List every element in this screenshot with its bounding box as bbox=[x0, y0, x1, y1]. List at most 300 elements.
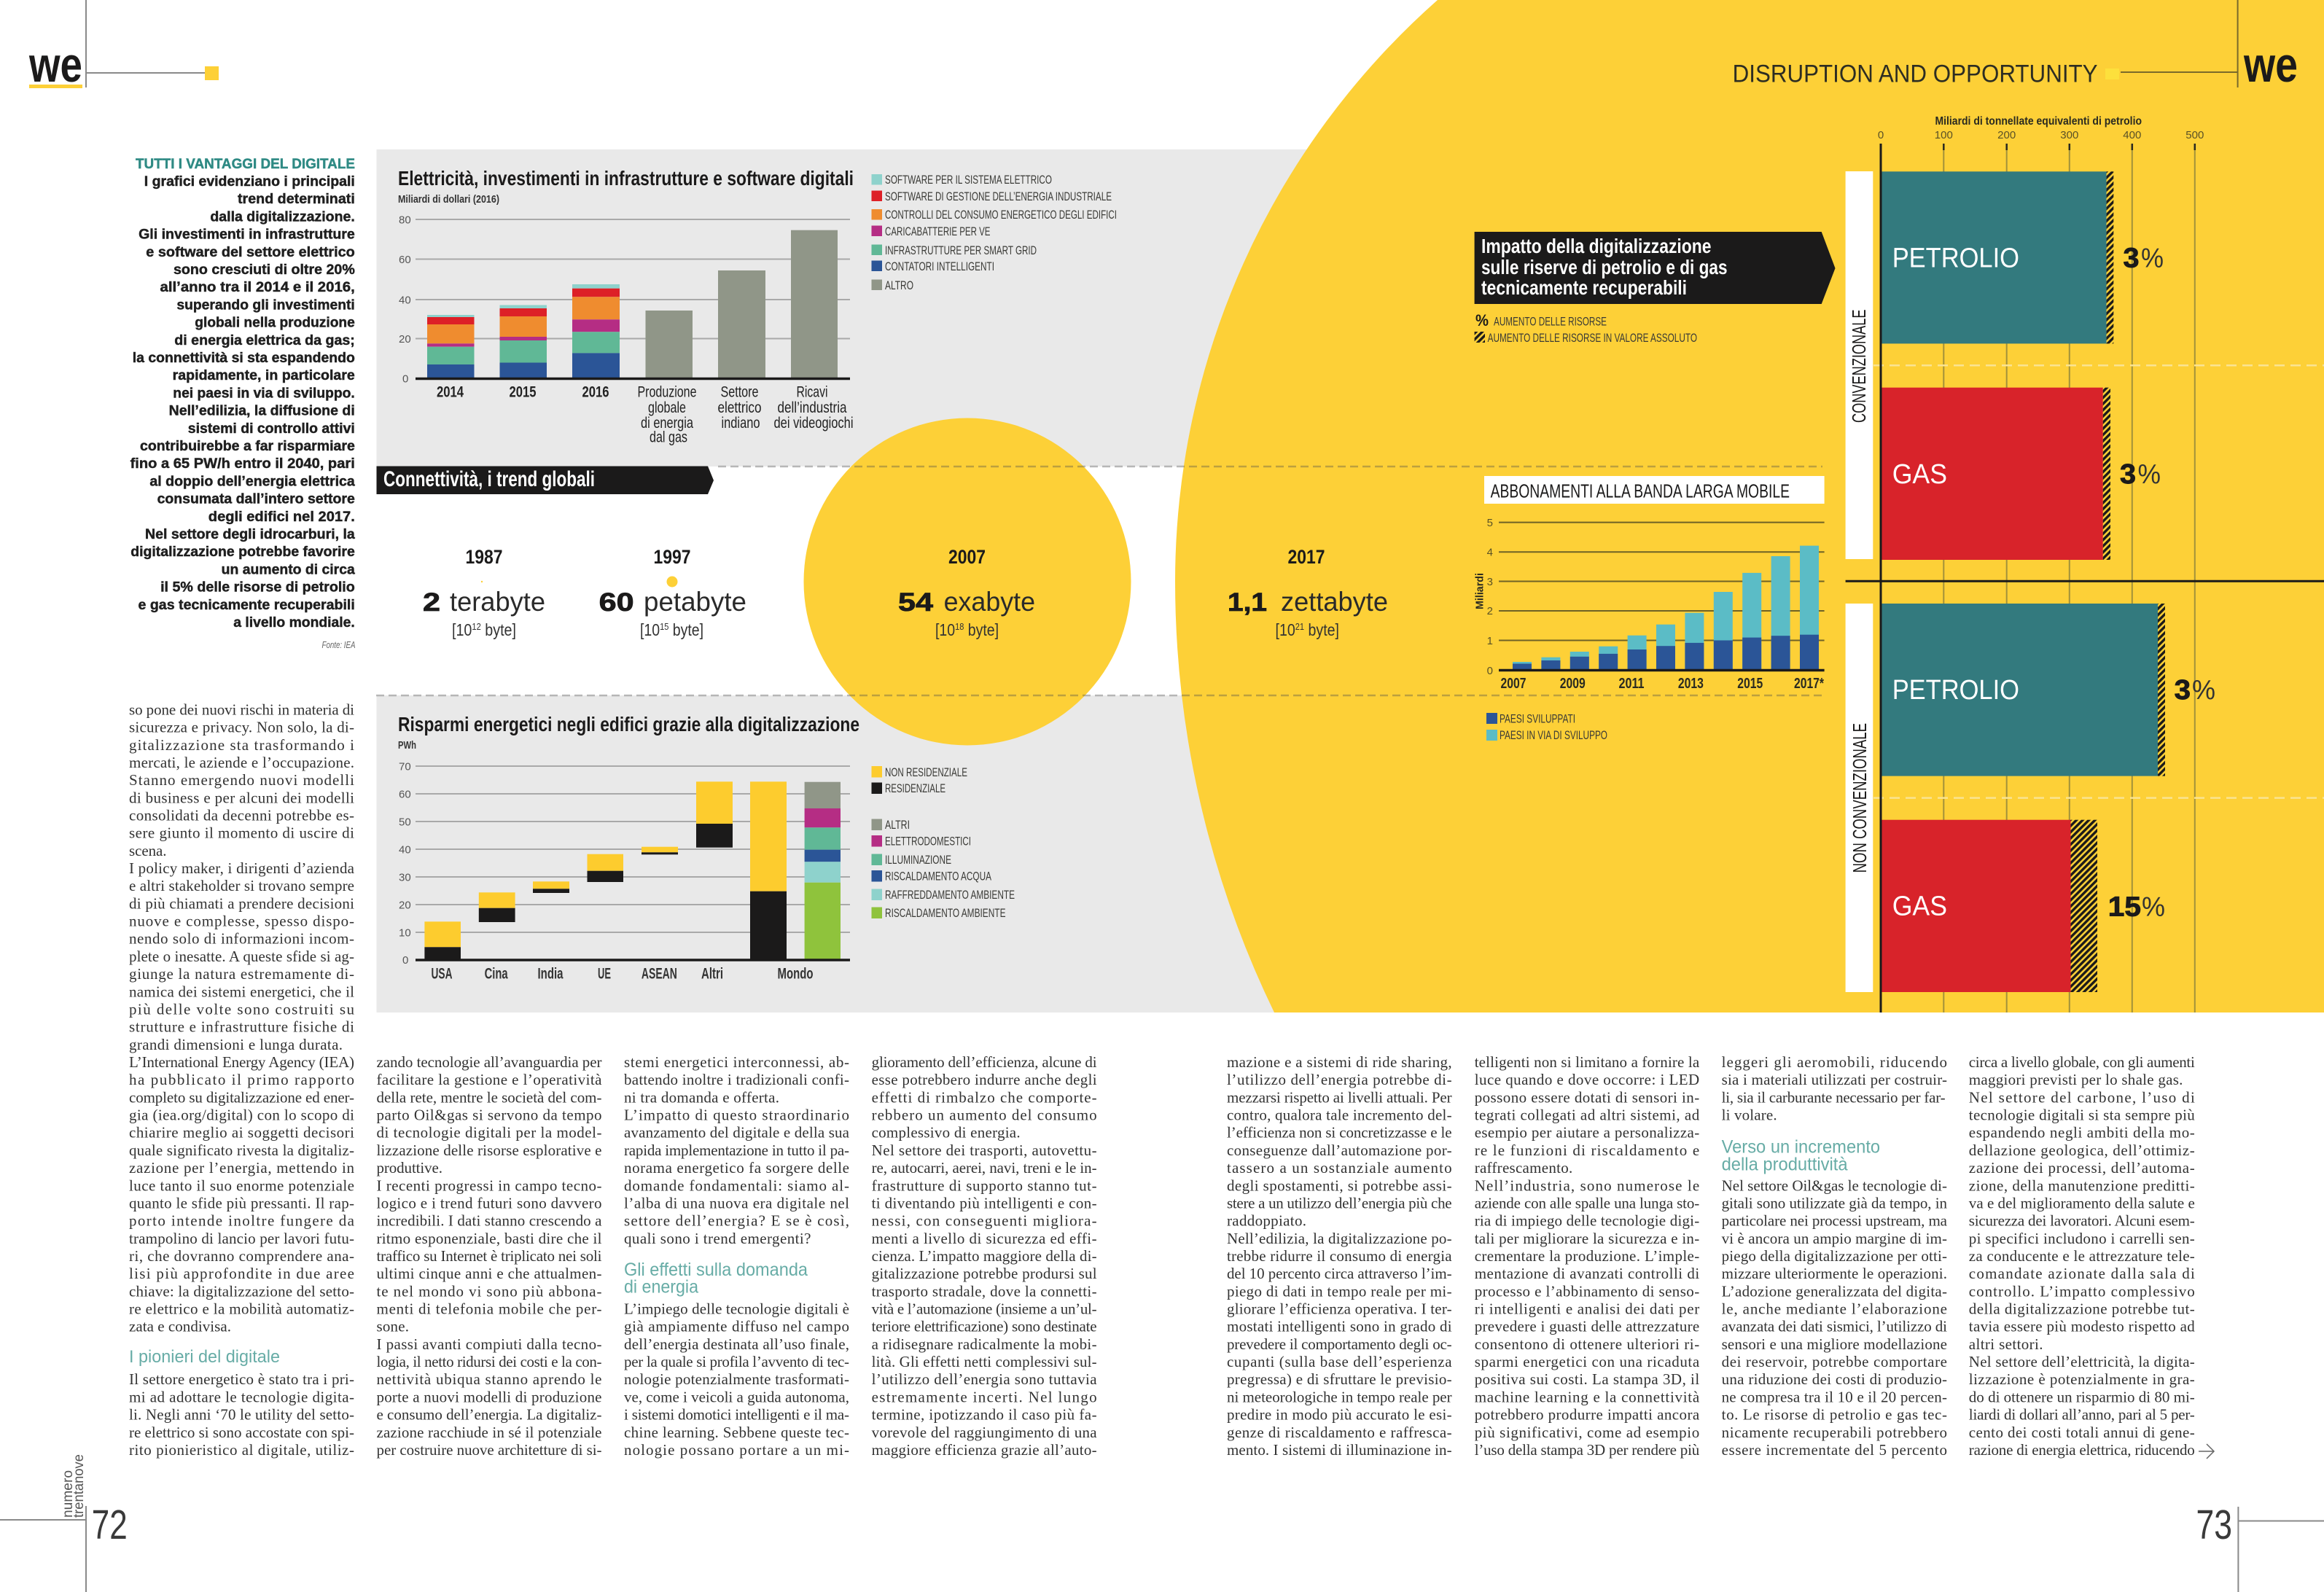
y axis labels: 20 bbox=[399, 333, 411, 346]
legend: SOFTWARE PER IL SISTEMA ELETTRICO bbox=[885, 173, 1052, 187]
callout: impatto della digitalizzazione: tecnicamente recuperabili bbox=[1481, 276, 1687, 299]
legend: CARICABATTERIE PER VE bbox=[885, 225, 990, 238]
bar: petrolio non convenzionale bbox=[1881, 604, 2215, 776]
article column 7: L’adozione generalizzata del digita- bbox=[1722, 1282, 1947, 1300]
article column 1: strutture e infrastrutture fisiche di bbox=[129, 1018, 354, 1036]
article column 4: gitalizzazione potrebbe prodursi sul bbox=[872, 1265, 1097, 1282]
y axis labels: 40 bbox=[399, 844, 411, 856]
article column 5: l’efficienza non si concretizzasse e le bbox=[1227, 1124, 1452, 1142]
article column 7: nicamente recuperabili potrebbero bbox=[1722, 1424, 1947, 1441]
article column 8: razione di energia elettrica, riducendo bbox=[1969, 1441, 2195, 1459]
article column 8: altri settori. bbox=[1969, 1335, 2043, 1353]
article column 7: una riduzione dei costi di produzio- bbox=[1722, 1370, 1947, 1388]
article column 1: ha pubblicato il primo rapporto bbox=[129, 1071, 354, 1088]
article column 7: essere incrementate del 5 percento bbox=[1722, 1441, 1947, 1459]
y axis labels: 5 bbox=[1487, 517, 1493, 529]
y axis labels bbox=[399, 761, 411, 967]
timeline 1997: byte] bbox=[668, 620, 703, 639]
timeline 1997: [10 bbox=[640, 620, 663, 639]
label band convenzionale: CONVENZIONALE bbox=[1848, 309, 1870, 423]
zero axis bbox=[1879, 144, 1882, 1012]
article column 8: tecnologie digitali si sta sempre più bbox=[1969, 1107, 2195, 1124]
article column 1: luce tanto il suo enorme potenziale bbox=[129, 1177, 354, 1194]
timeline 2007: 18 bbox=[955, 621, 964, 632]
sidebar: tutti i vantaggi del digitale: la connettività si sta espandendo bbox=[133, 351, 355, 366]
article column 8: della digitalizzazione potrebbe tut- bbox=[1969, 1300, 2195, 1318]
divider bbox=[1846, 580, 2324, 582]
x axis labels: 2009 bbox=[1560, 676, 1586, 692]
article column 6: prevedere i guasti delle attrezzature bbox=[1475, 1318, 1699, 1335]
chart: riserve petrolio e gas bbox=[1846, 115, 2324, 1012]
bar: petrolio convenzionale bbox=[1881, 171, 2164, 343]
article column 2: ritmo esponenziale, basti dire che il bbox=[376, 1230, 602, 1247]
legend: impact: % bbox=[1475, 311, 1489, 329]
dashed line top bbox=[718, 466, 1822, 467]
article column 5: degli spostamenti, si potrebbe assi- bbox=[1227, 1177, 1452, 1194]
article column 5: Nell’edilizia, la digitalizzazione po- bbox=[1227, 1230, 1452, 1247]
article column 2: per costruire nuove architetture di si- bbox=[376, 1441, 602, 1459]
page number 72: 72 bbox=[92, 1502, 128, 1548]
article column 4: teriore elettrificazione) sono destinate bbox=[872, 1318, 1097, 1335]
article column 6 bbox=[1475, 1053, 1700, 1459]
article column 1 bbox=[129, 701, 355, 1459]
article column 8: espandendo negli ambiti della mo- bbox=[1969, 1124, 2195, 1142]
dashed line bottom bbox=[376, 695, 1822, 696]
article column 7: to. Le risorse di petrolio e gas tec- bbox=[1722, 1406, 1947, 1424]
article column 1: I policy maker, i dirigenti d’azienda bbox=[129, 859, 355, 877]
article column 1: sicurezza e privacy. Non solo, la di- bbox=[129, 719, 354, 736]
page number 73: 73 bbox=[2196, 1502, 2232, 1548]
article column 6: consentono di ottenere ulteriori ri- bbox=[1475, 1335, 1699, 1353]
article column 8: dellazione geologica, dell’ottimiz- bbox=[1969, 1142, 2195, 1159]
article column 7: avanzata dei dati sismici, l’utilizzo di bbox=[1722, 1318, 1947, 1335]
big yellow circle 2017 bbox=[1175, 0, 2324, 1012]
article column 5: mazione e a sistemi di ride sharing, bbox=[1227, 1053, 1452, 1071]
bar: gas convenzionale: GAS bbox=[1892, 459, 1947, 490]
article column 3: settore dell’energia? E se è così, bbox=[624, 1212, 849, 1230]
bar: petrolio non convenzionale: PETROLIO bbox=[1892, 675, 2019, 706]
article column 4: a ridisegnare radicalmente la mobi- bbox=[872, 1335, 1097, 1353]
sidebar: tutti i vantaggi del digitale: sistemi di controllo attivi bbox=[188, 421, 355, 437]
light dashed separators bbox=[1873, 365, 2324, 798]
bar 2016 bbox=[572, 284, 620, 378]
article column 1: di più chiamati a prendere decisioni bbox=[129, 894, 354, 912]
article column 3: dell’energia destinata all’uso finale, bbox=[624, 1335, 849, 1353]
x axis labels: dell’industria bbox=[777, 399, 847, 416]
x axis labels: UE bbox=[598, 965, 611, 982]
article column 8: maggiori previsti per lo shale gas. bbox=[1969, 1071, 2183, 1088]
article column 1: Il settore energetico è stato tra i pri- bbox=[129, 1370, 354, 1388]
article column 5: cupanti (sulla base dell’esperienza bbox=[1227, 1353, 1452, 1370]
article column 1: giunge la natura estremamente di- bbox=[129, 965, 354, 983]
timeline 2017: 2017 bbox=[1287, 546, 1325, 568]
bars developed countries bbox=[1513, 635, 1819, 670]
article column 6: Nell’industria, sono numerose le bbox=[1475, 1177, 1699, 1194]
article column 7: gitali sono utilizzate già da tempo, in bbox=[1722, 1194, 1948, 1211]
header right: section title and logo: DISRUPTION AND OPPORTUNITY bbox=[1733, 60, 2098, 87]
article column 4: glioramento dell’efficienza, alcune di bbox=[872, 1053, 1097, 1071]
timeline 1987 bbox=[423, 546, 545, 639]
y axis labels bbox=[399, 214, 411, 385]
x axis labels: indiano bbox=[722, 415, 760, 432]
sidebar: tutti i vantaggi del digitale: digitalizzazione potrebbe favorire bbox=[130, 545, 355, 560]
article column 4: ti diventando più intelligenti e con- bbox=[872, 1194, 1097, 1211]
article column 3: L’impatto di questo straordinario bbox=[624, 1107, 849, 1124]
article column 1: li. Negli anni ‘70 le utility del setto- bbox=[129, 1406, 354, 1424]
bar: gas non convenzionale: GAS bbox=[1892, 891, 1947, 922]
article column 2: zando tecnologie all’avanguardia per bbox=[376, 1053, 602, 1071]
article column 7: li, sia il carburante necessario per far- bbox=[1722, 1088, 1946, 1106]
sidebar: tutti i vantaggi del digitale: un aumento di circa bbox=[222, 562, 355, 577]
header right: section title and logo bbox=[1733, 0, 2298, 93]
article column 1: consolidati da decenni potrebbe es- bbox=[129, 806, 354, 824]
x axis labels: 2016 bbox=[582, 383, 609, 401]
timeline 2007: 54 bbox=[898, 588, 934, 617]
timeline 2017: [10 bbox=[1276, 620, 1298, 639]
legend: RISCALDAMENTO AMBIENTE bbox=[885, 906, 1006, 920]
article column 2: logico e i trend futuri sono davvero bbox=[376, 1194, 602, 1211]
icon: yellow square bbox=[205, 66, 219, 80]
article column 1: e altri stakeholder si trovano sempre bbox=[129, 877, 354, 894]
x axis labels: 2013 bbox=[1678, 676, 1704, 692]
banner: connettivita trend globali: Connettività, i trend globali bbox=[383, 467, 595, 491]
article column 5: genze di riscaldamento e raffresca- bbox=[1227, 1424, 1452, 1441]
article column 6: esempio per aiutare a personalizza- bbox=[1475, 1124, 1699, 1142]
article column 2: ultimi cinque anni e che attualmen- bbox=[376, 1265, 602, 1282]
footer left: crop marks, issue label and page number bbox=[0, 1454, 128, 1592]
x axis labels bbox=[1500, 676, 1824, 692]
article column 8: lizzazione è potenzialmente in gra- bbox=[1969, 1370, 2195, 1388]
article column 1: gia (iea.org/digital) con lo scopo di bbox=[129, 1107, 354, 1124]
article column 7: dei reservoir, potrebbe comportare bbox=[1722, 1353, 1947, 1370]
bar: gas convenzionale: % bbox=[2137, 459, 2161, 490]
y axis labels: 0 bbox=[1487, 665, 1493, 677]
article column 7: particolare nei processi upstream, ma bbox=[1722, 1212, 1948, 1230]
article column 5: mezzarsi rispetto ai livelli attuali. Per bbox=[1227, 1088, 1452, 1106]
subheading: verso un incremento della produttivita: Verso un incremento bbox=[1722, 1136, 1880, 1157]
sidebar: tutti i vantaggi del digitale: all’anno tra il 2014 e il 2016, bbox=[160, 280, 355, 295]
timeline 1997: 60 bbox=[599, 588, 634, 617]
bar 2015 bbox=[500, 305, 547, 378]
bar: gas non convenzionale: 15 bbox=[2108, 892, 2141, 923]
article column 1: lisi più approfondite in due aree bbox=[129, 1265, 354, 1282]
article column 1: trampolino di lancio per lavori futu- bbox=[129, 1230, 354, 1247]
article column 3: battendo inoltre i tradizionali confi- bbox=[624, 1071, 849, 1088]
article column 4: maggiore efficienza grazie all’auto- bbox=[872, 1441, 1097, 1459]
sidebar: tutti i vantaggi del digitale: degli edifici nel 2017. bbox=[208, 510, 355, 525]
article column 5: gliorare l’efficienza operativa. I ter- bbox=[1227, 1300, 1452, 1318]
bar: petrolio non convenzionale: % bbox=[2192, 675, 2215, 706]
bar: gas convenzionale bbox=[1881, 388, 2161, 560]
article column 2: e consumo dell’energia. La digitaliz- bbox=[376, 1406, 602, 1424]
x axis labels: dei videogiochi bbox=[774, 415, 853, 432]
timeline 1997 bbox=[599, 546, 746, 639]
chart: investimenti in infrastrutture e software digitali bbox=[398, 167, 1117, 446]
timeline 1987: 1987 bbox=[465, 546, 503, 568]
axis tick labels bbox=[1878, 129, 2204, 141]
article column 1: nendo solo di informazioni incom- bbox=[129, 930, 354, 948]
article column 5: mostati intelligenti sono in grado di bbox=[1227, 1318, 1452, 1335]
article column 1: mi ad adottare le tecnologie digita- bbox=[129, 1388, 354, 1405]
waterfall bars yellow bbox=[424, 781, 787, 947]
legend: RISCALDAMENTO ACQUA bbox=[885, 869, 991, 883]
arrow: continue bbox=[2199, 1444, 2214, 1459]
article column 2 bbox=[376, 1053, 602, 1459]
article column 8: zazione dei processi, dell’automa- bbox=[1969, 1159, 2195, 1177]
timeline 2017: byte] bbox=[1304, 620, 1339, 639]
article column 5: del 10 percento circa attraverso l’im- bbox=[1227, 1265, 1452, 1282]
article column 4: l’utilizzo dell’energia sono tuttavia bbox=[872, 1370, 1097, 1388]
article column 8: va e del miglioramento della salute e bbox=[1969, 1194, 2195, 1211]
timeline 1987: terabyte bbox=[450, 587, 545, 617]
article column 2: zazione racchiude in sé il potenziale bbox=[376, 1424, 602, 1441]
article column 6: sparmi energetici con una ricaduta bbox=[1475, 1353, 1700, 1370]
stacked world bar by end use bbox=[805, 782, 841, 960]
article column 2: I passi avanti compiuti dalla tecno- bbox=[376, 1335, 602, 1353]
x axis labels: USA bbox=[432, 965, 452, 982]
y axis labels: 0 bbox=[402, 373, 408, 385]
y axis title: Miliardi bbox=[1474, 573, 1486, 609]
article column 6: luce quando e dove occorre: i LED bbox=[1475, 1071, 1699, 1088]
legend: PAESI IN VIA DI SVILUPPO bbox=[1500, 728, 1607, 742]
timeline 2017: 1,1 bbox=[1228, 588, 1267, 617]
article column 3: i sistemi domotici intelligenti e il ma- bbox=[624, 1406, 849, 1424]
article column 8: controllo. L’impatto complessivo bbox=[1969, 1282, 2195, 1300]
article column 1: porto intende inoltre fungere da bbox=[129, 1212, 355, 1230]
article column 1: so pone dei nuovi rischi in materia di bbox=[129, 701, 354, 718]
article column 8: do di ottenere un risparmio di 80 mi- bbox=[1969, 1388, 2195, 1405]
article column 2: facilitare la gestione e l’operatività bbox=[376, 1071, 602, 1088]
article column 7: li volare. bbox=[1722, 1107, 1777, 1124]
article column 3: L’impiego delle tecnologie digitali è bbox=[624, 1300, 849, 1318]
y axis labels: 80 bbox=[399, 214, 411, 226]
bar: petrolio non convenzionale: 3 bbox=[2175, 675, 2191, 706]
article column 1: mercati, le aziende e l’occupazione. bbox=[129, 754, 354, 771]
y axis labels: 70 bbox=[399, 761, 411, 773]
x axis labels: Produzione bbox=[637, 383, 697, 401]
x axis labels: 2015 bbox=[1737, 676, 1763, 692]
y axis labels: 20 bbox=[399, 900, 411, 911]
sidebar: tutti i vantaggi del digitale: superando gli investimenti bbox=[176, 297, 355, 313]
article column 2: menti di telefonia mobile che per- bbox=[376, 1300, 602, 1318]
article column 1: chiarire meglio ai soggetti decisori bbox=[129, 1124, 354, 1142]
axis title: Miliardi di tonnellate equivalenti di petrolio bbox=[1935, 115, 2142, 128]
article column 8: tavia essere più modesto rispetto ad bbox=[1969, 1318, 2195, 1335]
article column 4: esse potrebbero indurre anche degli bbox=[872, 1071, 1097, 1088]
article column 3: ve, come i veicoli a guida autonoma, bbox=[624, 1388, 849, 1405]
x axis labels: 2014 bbox=[437, 383, 464, 401]
sidebar: tutti i vantaggi del digitale: contribuirebbe a far risparmiare bbox=[140, 439, 355, 454]
article column 2: incredibili. I dati stanno crescendo a bbox=[376, 1212, 602, 1230]
article column 4: nessi, con conseguenti migliora- bbox=[872, 1212, 1097, 1230]
article column 1: ri, che dovranno comprendere ana- bbox=[129, 1247, 354, 1265]
article column 2: nettività ubiqua stanno aprendo le bbox=[376, 1370, 602, 1388]
icon: light yellow square bbox=[2105, 69, 2119, 79]
timeline 1987: byte] bbox=[481, 620, 516, 639]
article column 6: processo e l’abbinamento di senso- bbox=[1475, 1282, 1699, 1300]
y axis labels: 0 bbox=[402, 954, 408, 967]
article column 5: stere a un utilizzo dell’energia più che bbox=[1227, 1194, 1452, 1211]
article column 5: piego di dati in tempo reale per mi- bbox=[1227, 1282, 1452, 1300]
y axis labels: 40 bbox=[399, 294, 411, 306]
article column 6: ria di impiego delle tecnologie digi- bbox=[1475, 1212, 1699, 1230]
article column 2: sone. bbox=[376, 1318, 409, 1335]
article column 1: nuove e complesse, spesso dispo- bbox=[129, 913, 354, 930]
x axis labels: globale bbox=[648, 399, 686, 416]
y axis labels: 60 bbox=[399, 254, 411, 266]
x axis labels: Mondo bbox=[777, 965, 814, 982]
article column 7: le, anche mediante l’elaborazione bbox=[1722, 1300, 1947, 1318]
y axis labels: 2 bbox=[1487, 605, 1493, 617]
timeline 2007: exabyte bbox=[944, 587, 1035, 617]
article column 7 bbox=[1722, 1053, 1948, 1459]
article column 5: l’utilizzo dell’energia potrebbe di- bbox=[1227, 1071, 1452, 1088]
legend bbox=[1486, 711, 1607, 742]
article column 1: re elettrico e la mobilità automatiz- bbox=[129, 1300, 354, 1318]
legend: PAESI SVILUPPATI bbox=[1500, 711, 1575, 725]
article column 3: quali sono i trend emergenti? bbox=[624, 1230, 811, 1247]
article column 6: più significativi, come ad esempio bbox=[1475, 1424, 1699, 1441]
subheading: gli effetti sulla domanda di energia: Gli effetti sulla domanda bbox=[624, 1260, 808, 1280]
bar: gas non convenzionale: % bbox=[2142, 892, 2165, 923]
axis tick labels: 300 bbox=[2060, 129, 2078, 141]
article column 2: della rete, mentre le società del com- bbox=[376, 1088, 602, 1106]
legend: ALTRI bbox=[885, 818, 910, 832]
y axis labels: 1 bbox=[1487, 635, 1493, 647]
subheading: verso un incremento della produttivita bbox=[1722, 1136, 1880, 1175]
article column 6: mentazione di avanzati controlli di bbox=[1475, 1265, 1699, 1282]
article column 8: Nel settore del carbone, l’uso di bbox=[1969, 1088, 2195, 1106]
article column 2: I recenti progressi in campo tecno- bbox=[376, 1177, 602, 1194]
sidebar: tutti i vantaggi del digitale: nei paesi in via di sviluppo. bbox=[173, 386, 355, 401]
axis tick labels: 400 bbox=[2123, 129, 2141, 141]
article column 6: re le funzioni di riscaldamento e bbox=[1475, 1142, 1699, 1159]
article column 4: vorevole del raggiungimento di una bbox=[872, 1424, 1097, 1441]
article column 2: parto Oil&gas si servono da tempo bbox=[376, 1107, 602, 1124]
sidebar: tutti i vantaggi del digitale: globali nella produzione bbox=[195, 316, 355, 331]
axis tick labels: 0 bbox=[1878, 129, 1884, 141]
article column 7: sensori e una migliore modellazione bbox=[1722, 1335, 1947, 1353]
article column 5: raddoppiato. bbox=[1227, 1212, 1306, 1230]
article column 6: tali per migliorare la sicurezza e in- bbox=[1475, 1230, 1699, 1247]
article column 6: crementare la produzione. L’imple- bbox=[1475, 1247, 1699, 1265]
logo we: we bbox=[28, 37, 82, 93]
legend: RESIDENZIALE bbox=[885, 781, 945, 795]
timeline 2007: [10 bbox=[935, 620, 959, 639]
comparison bars bbox=[646, 230, 838, 378]
article column 8: liardi di dollari all’anno, pari al 5 per- bbox=[1969, 1406, 2195, 1424]
timeline 2017: 21 bbox=[1295, 621, 1304, 632]
article column 7: sia i materiali utilizzati per costruir- bbox=[1722, 1071, 1947, 1088]
legend: CONTROLLI DEL CONSUMO ENERGETICO DEGLI EDIFICI bbox=[885, 208, 1117, 222]
article column 7: mizzare ulteriormente le operazioni. bbox=[1722, 1265, 1947, 1282]
timeline 1987: 2 bbox=[423, 588, 440, 617]
x axis labels: ASEAN bbox=[642, 965, 677, 982]
article column 7: vi è ancora un ampio margine di im- bbox=[1722, 1230, 1947, 1247]
article column 3: l’alba di una nuova era digitale nel bbox=[624, 1194, 849, 1211]
article column 3: chine learning. Sebbene queste tec- bbox=[624, 1424, 849, 1441]
timeline 1987: 12 bbox=[472, 621, 481, 632]
chart title box: ABBONAMENTI ALLA BANDA LARGA MOBILE bbox=[1491, 480, 1790, 502]
article column 8: Nel settore dell’elettricità, la digita- bbox=[1969, 1353, 2195, 1370]
article column 2: produttive. bbox=[376, 1159, 442, 1177]
chart: abbonamenti alla banda larga mobile bbox=[1474, 476, 1825, 742]
article column 7: piego della digitalizzazione per otti- bbox=[1722, 1247, 1947, 1265]
article column 4: Nel settore dei trasporti, autovettu- bbox=[872, 1142, 1097, 1159]
bar: petrolio convenzionale: 3 bbox=[2123, 243, 2139, 274]
article column 5: trebbe ridurre il consumo di energia bbox=[1227, 1247, 1452, 1265]
article column 3: domande fondamentali: siamo al- bbox=[624, 1177, 849, 1194]
panel: grey background electricity bbox=[376, 149, 1324, 467]
article column 8: za conducente e le attrezzature tele- bbox=[1969, 1247, 2195, 1265]
article column 6: machine learning e la connettività bbox=[1475, 1388, 1700, 1405]
bar: petrolio convenzionale: % bbox=[2141, 243, 2164, 274]
legend: impact: AUMENTO DELLE RISORSE bbox=[1494, 314, 1607, 328]
article column 1: rito pionieristico al digitale, utiliz- bbox=[129, 1441, 354, 1459]
sidebar: tutti i vantaggi del digitale: TUTTI I VANTAGGI DEL DIGITALE bbox=[136, 157, 355, 172]
axis tick labels: 500 bbox=[2185, 129, 2204, 141]
article column 8: zione, della manutenzione preditti- bbox=[1969, 1177, 2195, 1194]
legend: SOFTWARE DI GESTIONE DELL’ENERGIA INDUSTRIALE bbox=[885, 190, 1112, 203]
bar: gas convenzionale: 3 bbox=[2120, 459, 2136, 490]
article column 1: di business e per alcuni dei modelli bbox=[129, 789, 354, 806]
issue label: trentanove bbox=[71, 1454, 87, 1518]
article column 4: vità e l’automazione (insieme a un’ul- bbox=[872, 1300, 1097, 1318]
sidebar: tutti i vantaggi del digitale: e software del settore elettrico bbox=[146, 245, 355, 260]
label band convenzionale bbox=[1846, 171, 1873, 559]
bar 2014 bbox=[427, 315, 474, 378]
article column 5: contro, qualora tale incremento del- bbox=[1227, 1107, 1452, 1124]
callout: impatto della digitalizzazione: sulle riserve di petrolio e di gas bbox=[1481, 256, 1728, 278]
waterfall bars black bbox=[424, 824, 787, 960]
article column 6: raffrescamento. bbox=[1475, 1159, 1572, 1177]
legend bbox=[872, 765, 1015, 920]
article column 1: zazione per l’energia, mettendo in bbox=[129, 1159, 354, 1177]
y axis labels: 10 bbox=[399, 927, 411, 939]
x axis labels: 2007 bbox=[1500, 676, 1526, 692]
panel: grey background savings bbox=[376, 695, 1324, 1012]
x axis labels: 2015 bbox=[509, 383, 537, 401]
x axis labels: Settore bbox=[720, 383, 758, 401]
article column 8: cento dei costi totali annui di gene- bbox=[1969, 1424, 2195, 1441]
sidebar: tutti i vantaggi del digitale: Nel settore degli idrocarburi, la bbox=[145, 527, 355, 542]
article column 3: nologie potenzialmente trasformati- bbox=[624, 1370, 849, 1388]
sidebar: tutti i vantaggi del digitale: il 5% delle risorse di petrolio bbox=[160, 580, 355, 596]
article column 3: già ampiamente diffuso nel campo bbox=[624, 1318, 849, 1335]
article column 2: traffico su Internet è triplicato nei soli bbox=[376, 1247, 602, 1265]
sidebar: tutti i vantaggi del digitale: Gli investimenti in infrastrutture bbox=[139, 227, 355, 243]
article column 1: scena. bbox=[129, 842, 166, 859]
legend: CONTATORI INTELLIGENTI bbox=[885, 260, 994, 273]
x axis labels: Altri bbox=[701, 965, 723, 982]
article column 4: lità. Gli effetti netti complessivi sul- bbox=[872, 1353, 1097, 1370]
article column 5: predire in modo più accurato le esi- bbox=[1227, 1406, 1452, 1424]
article column 1: grandi dimensioni e lunga durata. bbox=[129, 1036, 343, 1053]
article column 1: più delle volte sono costruiti su bbox=[129, 1000, 354, 1018]
article column 6: telligenti non si limitano a fornire la bbox=[1475, 1053, 1700, 1071]
legend: ALTRO bbox=[885, 278, 913, 292]
article column 1: re elettrico si sono accostate con spi- bbox=[129, 1424, 354, 1441]
article column 7: Nel settore Oil&gas le tecnologie di- bbox=[1722, 1177, 1947, 1194]
timeline 2017: zettabyte bbox=[1281, 587, 1388, 617]
y axis labels: 60 bbox=[399, 789, 411, 800]
article column 3: nologie possano portare a un mi- bbox=[624, 1441, 849, 1459]
icon: tiny dot bbox=[481, 581, 483, 582]
article column 3 bbox=[624, 1053, 850, 1459]
unit: PWh bbox=[398, 739, 416, 752]
subheading: i pionieri del digitale: I pionieri del digitale bbox=[129, 1347, 280, 1367]
article column 1: quale significato rivesta la digitaliz- bbox=[129, 1142, 354, 1159]
